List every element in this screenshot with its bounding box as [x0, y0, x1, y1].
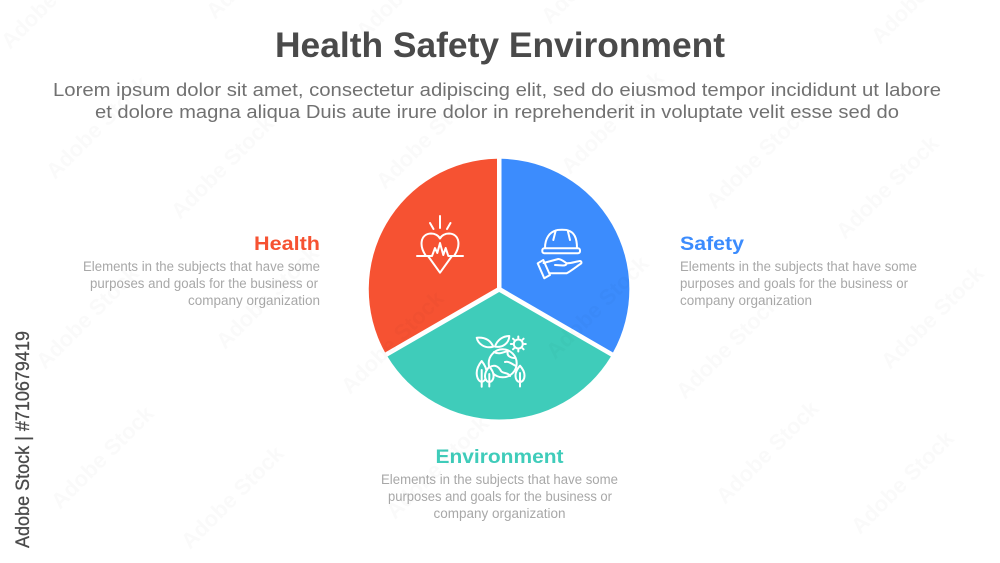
- title: Health Safety Environment: [275, 26, 725, 65]
- watermark pattern: Adobe Stock: [176, 440, 289, 554]
- subtitle text block: [53, 80, 941, 122]
- text block: environment: company organization: [434, 506, 566, 521]
- watermark pattern: Adobe Stock: [711, 395, 824, 509]
- pie chart: [369, 159, 629, 420]
- icon: hard hat on hand: [538, 230, 581, 278]
- subtitle text block: Lorem ipsum dolor sit amet, consectetur adipiscing elit, sed do eiusmod tempor incididunt ut labore: [53, 80, 941, 100]
- icon: globe with leaves, sun and trees: [477, 336, 526, 387]
- heading: health: Health: [254, 234, 320, 255]
- heading: environment: Environment: [436, 447, 564, 468]
- watermark pattern: Adobe Stock: [831, 130, 944, 244]
- text block: safety: company organization: [680, 293, 812, 308]
- stock id side label: Adobe Stock | #710679419: [12, 331, 34, 548]
- watermark pattern: Adobe Stock: [556, 65, 669, 179]
- text block: environment: Elements in the subjects that have some: [381, 472, 618, 487]
- segment: health: [369, 159, 497, 352]
- text block: environment: [381, 472, 618, 521]
- label: health: [83, 234, 320, 308]
- watermark pattern: Adobe Stock: [876, 260, 989, 374]
- text block: health: purposes and goals for the business or: [90, 276, 318, 291]
- heading: safety: Safety: [680, 234, 744, 255]
- label: safety: [680, 234, 917, 308]
- watermark pattern: Adobe Stock: [671, 290, 784, 404]
- text block: environment: purposes and goals for the business or: [388, 489, 612, 504]
- watermark pattern: Adobe Stock: [371, 80, 484, 194]
- label: environment: [381, 447, 618, 521]
- watermark pattern: Adobe Stock: [211, 240, 324, 354]
- watermark pattern: Adobe Stock: [381, 410, 494, 524]
- text block: safety: Elements in the subjects that have some: [680, 259, 917, 274]
- text block: health: company organization: [188, 293, 320, 308]
- icon: heart with pulse: [417, 216, 463, 273]
- watermark pattern: Adobe Stock: [846, 425, 959, 539]
- watermark pattern: Adobe Stock: [701, 100, 814, 214]
- text block: health: Elements in the subjects that have some: [83, 259, 320, 274]
- watermark pattern: Adobe Stock: [46, 400, 159, 514]
- watermark pattern: Adobe Stock: [31, 260, 144, 374]
- text block: health: [83, 259, 320, 308]
- segment: safety: [502, 159, 629, 352]
- watermark pattern: Adobe Stock: [336, 285, 449, 399]
- subtitle text block: et dolore magna aliqua Duis aute irure dolor in reprehenderit in voluptate velit esse sed do: [95, 102, 899, 122]
- watermark pattern: Adobe Stock: [41, 70, 154, 184]
- watermark pattern: Adobe Stock: [166, 110, 279, 224]
- text block: safety: [680, 259, 917, 308]
- text block: safety: purposes and goals for the business or: [680, 276, 908, 291]
- watermark pattern: Adobe Stock: [541, 250, 654, 364]
- segment: environment: [388, 292, 611, 420]
